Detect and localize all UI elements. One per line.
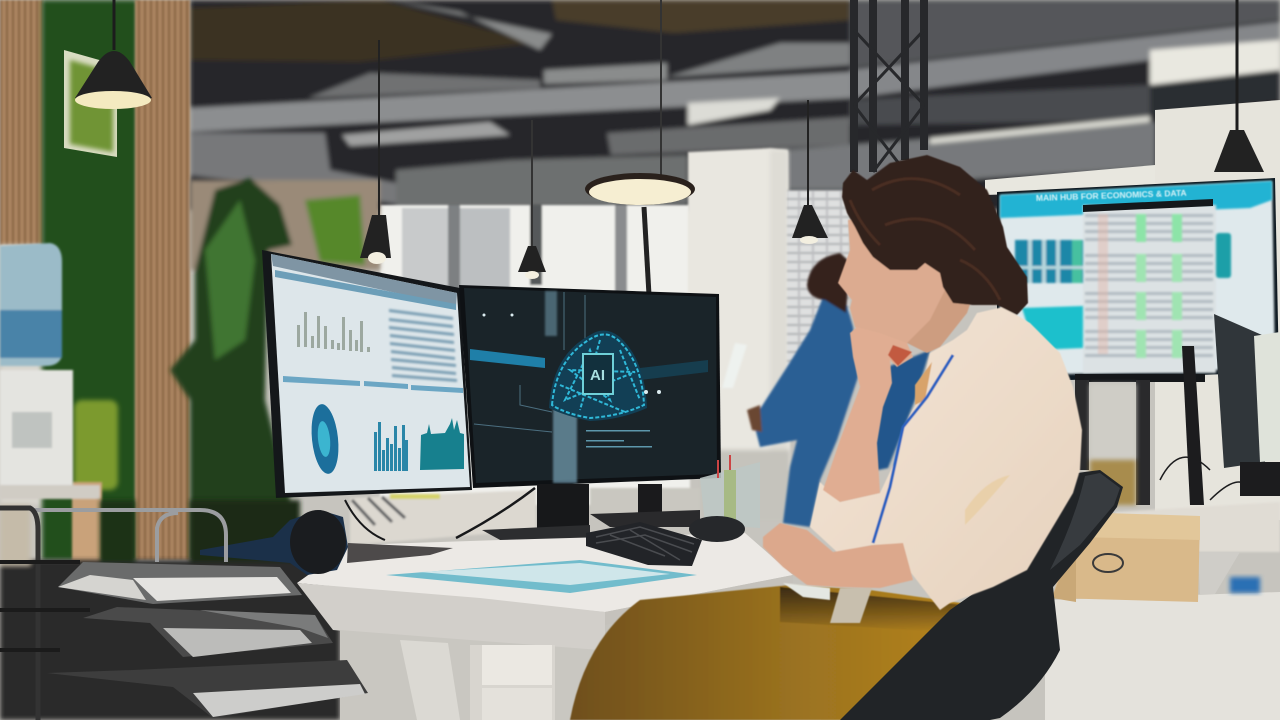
document trays: [0, 508, 368, 720]
left wall: wood and green panels: [0, 0, 190, 567]
AI brain: [549, 330, 647, 421]
white column: [688, 148, 790, 470]
tree lines: [474, 292, 585, 432]
background stand and right monitor: [1075, 314, 1280, 505]
middle tray: [83, 607, 333, 657]
keyboard: [586, 522, 702, 566]
bottom tray: [47, 660, 368, 718]
headset: [200, 510, 453, 575]
water cooler: [0, 243, 100, 499]
hair: [842, 155, 1028, 315]
mouse: [689, 516, 745, 542]
skirt: [570, 585, 975, 720]
back right wall: [1155, 100, 1280, 520]
area chart: [420, 418, 464, 470]
left monitor: [262, 250, 472, 498]
lanyard: [873, 355, 953, 543]
center monitor: [459, 285, 721, 488]
woman: [763, 155, 1082, 623]
badge: [830, 588, 872, 623]
main desk: [297, 533, 793, 720]
pen holder: [700, 455, 760, 528]
top tray: [58, 562, 302, 604]
monitor stands: [345, 484, 700, 541]
items behind monitors: [350, 488, 700, 545]
wall screen tiles: [1015, 240, 1083, 283]
wall screen title: MAIN HUB FOR ECONOMICS & DATA: [1036, 188, 1187, 203]
teal data bars: [470, 349, 545, 368]
desk lamp: [585, 173, 695, 295]
plants: [170, 178, 380, 560]
background lower-left furniture shadow: [0, 500, 340, 720]
arm on chin: [823, 327, 913, 502]
AI brain: AI: [590, 367, 605, 384]
ceiling: [190, 0, 1280, 210]
man in blue blazer: [722, 253, 930, 527]
truss: [854, 0, 924, 172]
cardboard box: [1052, 512, 1200, 602]
background grid panel: [787, 190, 849, 370]
folder on desk: [386, 560, 697, 593]
wall screen: [997, 178, 1279, 382]
pendant lamps: [75, 0, 1264, 279]
left monitor header: [271, 254, 457, 306]
right desk: [1045, 502, 1280, 720]
bar chart: upper: [297, 312, 370, 352]
windows: [380, 205, 690, 505]
face: [838, 215, 945, 343]
bar chart: lower: [374, 422, 408, 471]
ring chart: [308, 403, 342, 475]
office chair: [840, 470, 1123, 720]
list rows: [389, 309, 457, 382]
section bars: [283, 376, 463, 393]
forearm and hand: [763, 523, 913, 588]
blouse: [810, 307, 1082, 610]
neck: [873, 255, 975, 353]
